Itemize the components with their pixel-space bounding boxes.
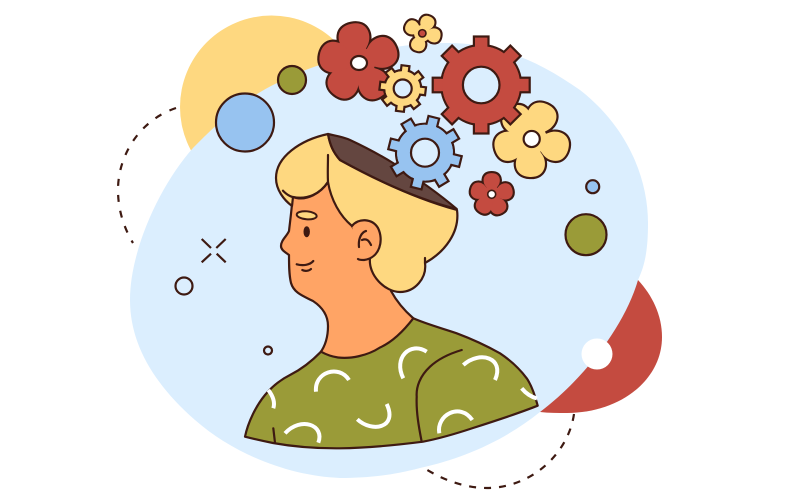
ear outline xyxy=(352,220,381,260)
shirt pattern xyxy=(268,348,537,443)
icon: large yellow flower xyxy=(491,98,572,178)
icon: red gear xyxy=(433,36,530,134)
olive dot top xyxy=(278,66,306,94)
white circle xyxy=(582,338,612,370)
icon: small yellow flower xyxy=(403,14,442,53)
light blue blob xyxy=(130,43,648,478)
person xyxy=(245,134,538,448)
olive dot right xyxy=(566,214,606,255)
small hollow circle xyxy=(264,346,272,354)
icon: yellow gear xyxy=(379,65,426,112)
icon: red flower xyxy=(317,21,402,105)
eyebrow xyxy=(296,210,317,220)
face and neck xyxy=(281,170,420,375)
eye xyxy=(304,226,310,237)
shirt xyxy=(245,318,538,448)
dashed arc bottom xyxy=(424,414,574,488)
hair xyxy=(276,134,457,292)
red background shape xyxy=(540,280,662,413)
ear xyxy=(352,220,381,260)
icon: blue gear xyxy=(388,116,462,189)
sparkle cross xyxy=(202,239,226,262)
mouth xyxy=(297,261,313,271)
hollow circle xyxy=(176,278,192,294)
icon: small red flower xyxy=(469,173,514,217)
blue circle xyxy=(216,94,274,152)
yellow background circle xyxy=(180,16,363,198)
head opening xyxy=(328,134,457,209)
small blue dot xyxy=(586,180,599,193)
shirt sleeve seams xyxy=(273,350,462,443)
dashed arc left xyxy=(118,108,176,243)
hair strands xyxy=(283,155,425,263)
